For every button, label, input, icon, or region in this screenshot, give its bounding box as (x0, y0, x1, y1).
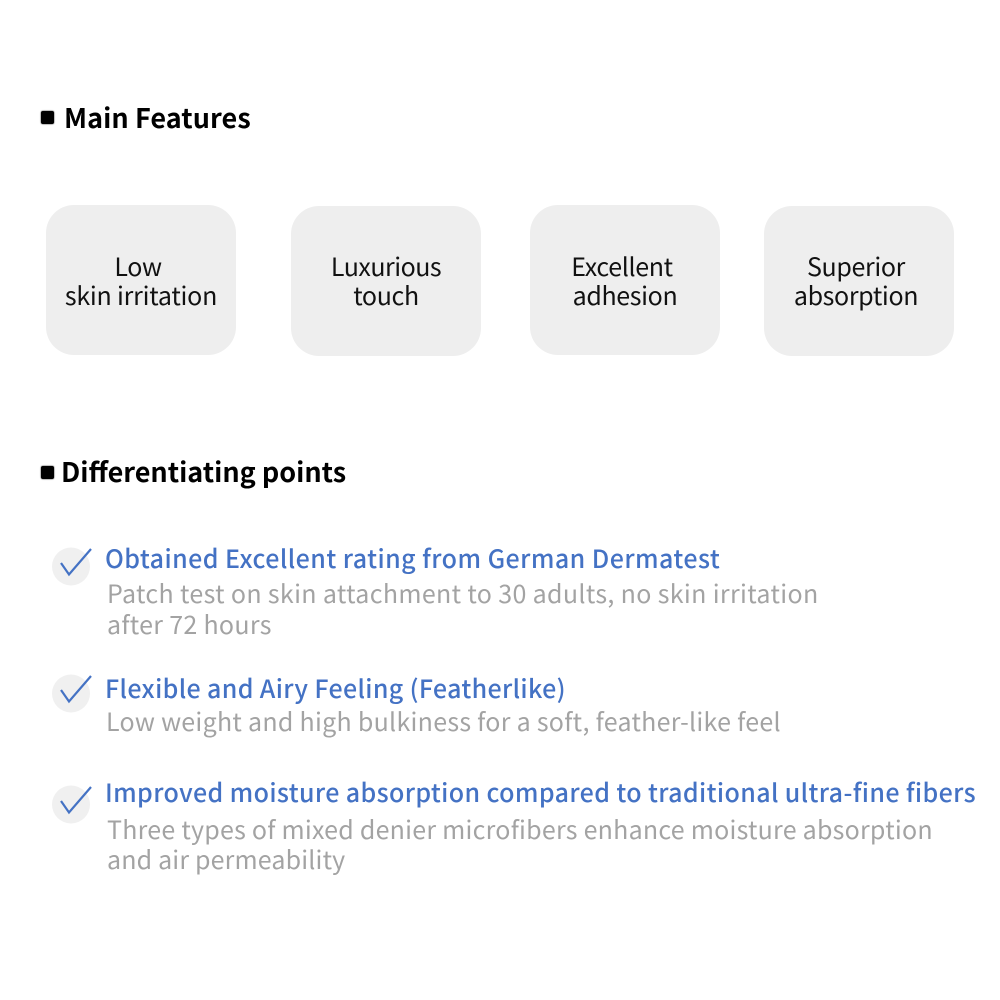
feature label: Low skin irritation: skin irritation (65, 277, 217, 313)
icon: check 1 (52, 548, 92, 586)
point description 2: Low weight and high bulkiness for a soft, feather-like feel (106, 703, 781, 739)
icon: check 3 (52, 786, 92, 824)
feature card: Luxurious touch (291, 206, 481, 356)
feature label: Superior absorption (794, 248, 918, 313)
icon: check 2 (52, 674, 92, 712)
feature label: Excellent adhesion: Excellent (571, 248, 673, 284)
point description 3: and air permeability (107, 841, 345, 877)
point description 1: after 72 hours (107, 606, 272, 642)
feature label: Luxurious touch (331, 248, 441, 313)
point description 3 (107, 811, 933, 877)
feature card: Excellent adhesion (530, 205, 720, 355)
feature label: Low skin irritation (65, 248, 217, 313)
point description 3: Three types of mixed denier microfibers enhance moisture absorption (107, 811, 933, 847)
heading: Main Features: Main Features (64, 97, 251, 136)
feature label: Excellent adhesion (571, 248, 677, 313)
feature card: Superior absorption (764, 206, 954, 356)
feature label: Luxurious touch: Luxurious (331, 248, 441, 284)
feature label: Luxurious touch: touch (353, 277, 419, 313)
feature label: Superior absorption: absorption (794, 277, 918, 313)
point title 1: Obtained Excellent rating from German Dermatest (105, 540, 720, 576)
point description 1: Patch test on skin attachment to 30 adults, no skin irritation (107, 575, 819, 611)
feature label: Superior absorption: Superior (807, 248, 905, 284)
heading: Differentiating points: Differentiating points (61, 451, 346, 490)
point title 2: Flexible and Airy Feeling (Featherlike) (105, 670, 566, 706)
feature card: Low skin irritation (46, 205, 236, 355)
point description 1 (107, 575, 819, 642)
feature label: Excellent adhesion: adhesion (573, 277, 677, 313)
feature label: Low skin irritation: Low (114, 248, 162, 284)
point title 3: Improved moisture absorption compared to traditional ultra-fine fibers (105, 774, 976, 810)
